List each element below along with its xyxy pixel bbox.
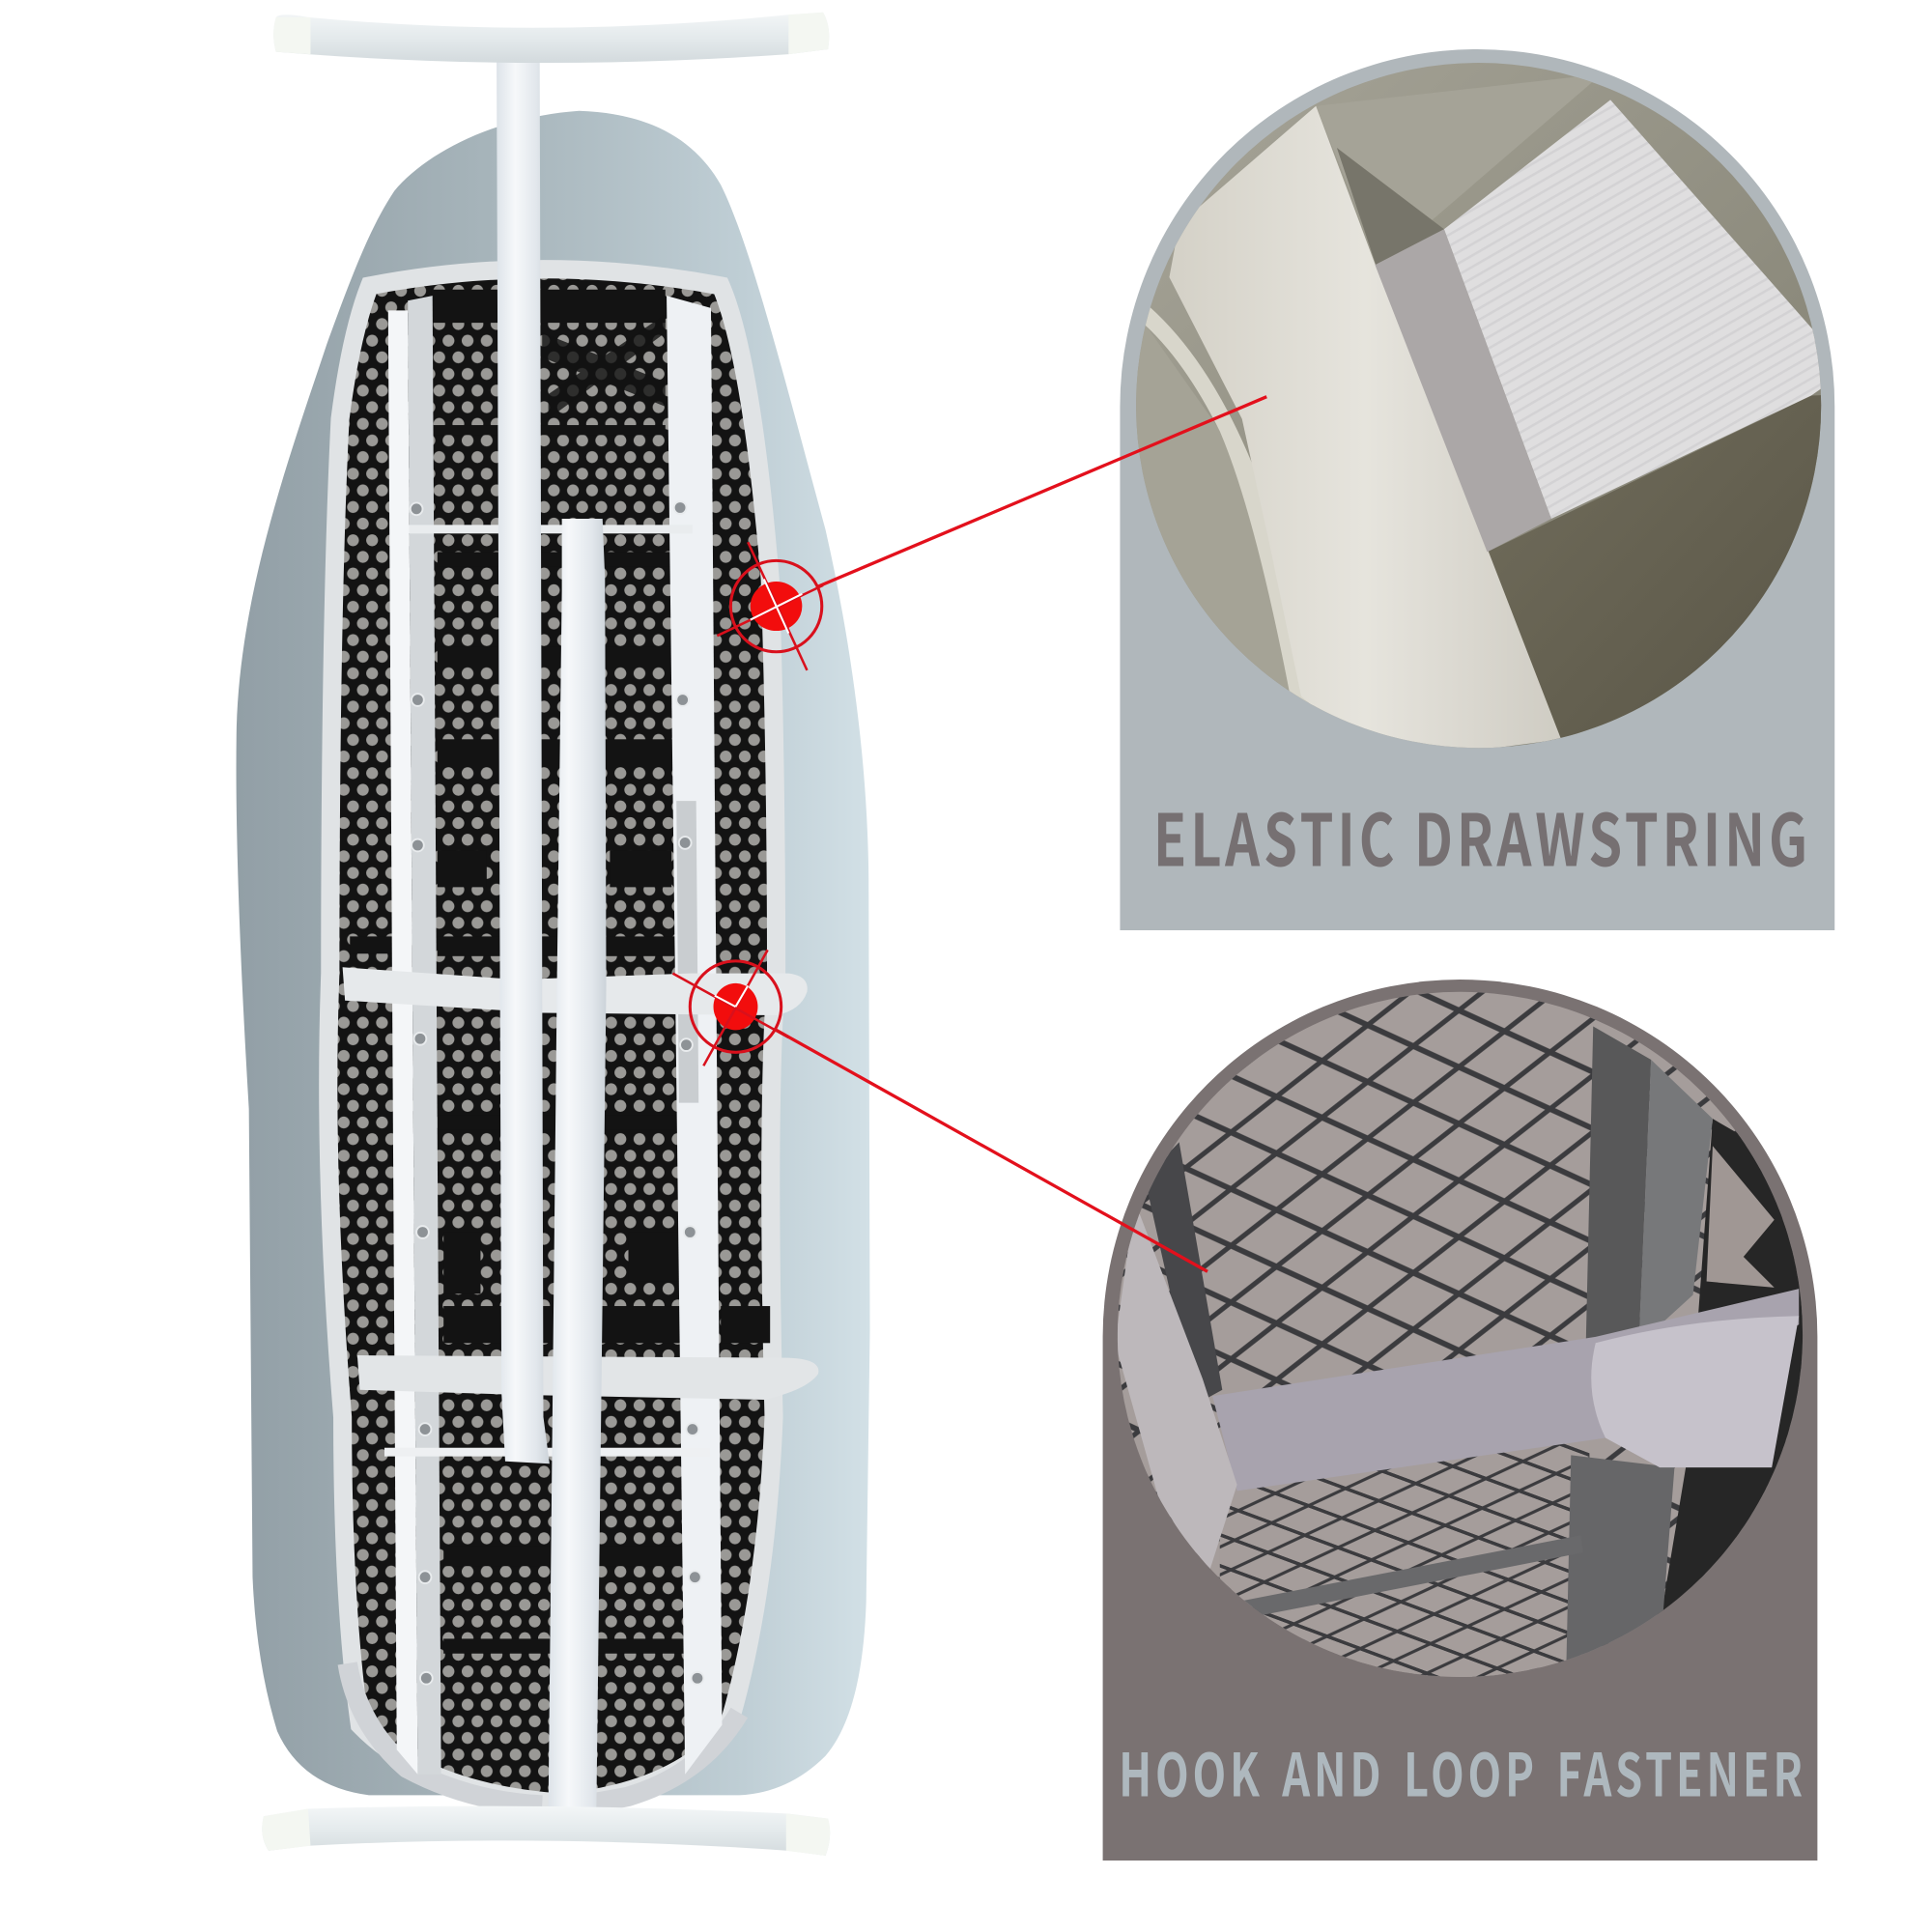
strap lower (357, 1355, 818, 1400)
cross brace lower (384, 1448, 710, 1457)
bottom T-bar (262, 1806, 830, 1856)
right frame rail (667, 296, 722, 1775)
panel background (1103, 980, 1817, 1861)
panel background (1120, 49, 1834, 930)
screws (411, 501, 703, 1685)
board cover (237, 111, 870, 1795)
icon: target marker upper (717, 542, 823, 670)
panel: hook and loop fastener (1096, 974, 1836, 1861)
callout: drawstring leader line (818, 397, 1266, 586)
handle stem bottom (549, 519, 607, 1811)
callout: fastener leader line (777, 1030, 1208, 1271)
icon: target marker lower (672, 950, 788, 1065)
left frame rail (388, 296, 441, 1775)
handle stem top (497, 55, 550, 1463)
panel: elastic drawstring (1109, 49, 1848, 930)
product: ironing board underside (237, 13, 870, 1856)
top T-bar (273, 13, 829, 63)
detail photo: hook and loop fastener (1117, 991, 1803, 1677)
detail photo: elastic drawstring (1136, 63, 1822, 748)
cross brace upper (409, 525, 693, 533)
strap upper (343, 967, 808, 1015)
mesh opening with hem (328, 270, 777, 1805)
